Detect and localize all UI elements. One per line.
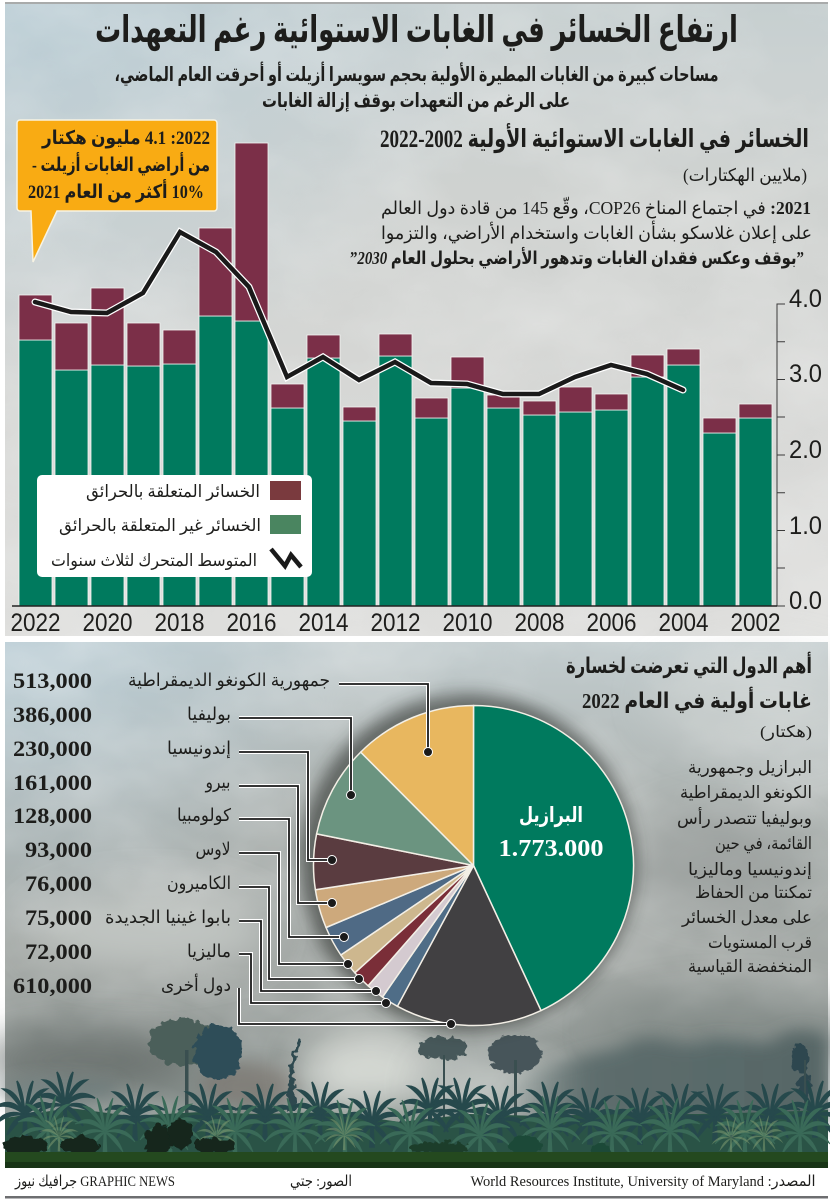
year labels: 2006 — [586, 609, 636, 637]
slice: Cameroon — [355, 866, 474, 986]
country names: بابوا غينيا الجديدة — [105, 907, 231, 927]
pie commentary: على معدل الخسائر — [681, 908, 812, 927]
Brazil label: البرازيل — [519, 803, 583, 827]
bars: non-fire losses — [19, 316, 772, 606]
legend — [37, 475, 312, 577]
country values: 610,000 — [13, 973, 92, 998]
year labels: 2020 — [82, 609, 132, 637]
axis labels: 4.0 — [789, 285, 822, 313]
callout: 2022: من أراضي الغابات أزيلت - — [32, 152, 210, 176]
year labels: 2018 — [154, 609, 204, 637]
country names: دول أخرى — [161, 973, 231, 996]
distant smoky tree line — [0, 1030, 828, 1125]
country values: 72,000 — [25, 939, 92, 964]
country names: ماليزيا — [187, 941, 231, 961]
COP26 note: على إعلان غلاسكو بشأن الغابات واستخدام الأراضي، والتزموا — [381, 220, 812, 244]
subtitle: على الرغم من التعهدات بوقف إزالة الغابات — [262, 91, 570, 112]
subtitle — [114, 61, 718, 112]
year labels: 2012 — [370, 609, 420, 637]
pie commentary: قرب المستويات — [708, 933, 812, 952]
slice: DR Congo — [361, 706, 474, 866]
pie unit: (هكتار) — [760, 724, 812, 742]
country names — [105, 670, 330, 996]
country names: جمهورية الكونغو الديمقراطية — [128, 670, 330, 691]
year labels: 2004 — [658, 609, 709, 637]
country values: 230,000 — [13, 736, 92, 761]
axis — [12, 304, 785, 606]
photo: burning forest — [0, 1018, 830, 1168]
pie commentary: القائمة، في حين — [715, 834, 812, 854]
moving average line — [35, 232, 683, 394]
country names: بوليفيا — [187, 704, 231, 724]
dark bushes — [3, 1119, 610, 1159]
axis labels: 2.0 — [789, 436, 822, 464]
country names: كولومبيا — [177, 805, 232, 825]
country values: 76,000 — [25, 871, 92, 896]
country names: إندونيسيا — [167, 738, 231, 759]
Brazil label: 1.773.000 — [498, 836, 604, 862]
legend: non-fire losses: الخسائر غير المتعلقة بالحرائق — [59, 516, 261, 535]
slice: other countries — [397, 866, 541, 1026]
country values: 75,000 — [25, 905, 92, 930]
COP26 note: 2021: في اجتماع المناخ COP26، وقّع 145 من قادة دول العالم — [381, 197, 811, 219]
pie commentary: إندونيسيا وماليزيا — [688, 860, 812, 879]
country names: لاوس — [196, 839, 230, 860]
pie heading — [566, 651, 812, 713]
axis labels: 3.0 — [789, 360, 822, 388]
slice: Indonesia — [314, 834, 474, 890]
slice: Malaysia — [382, 866, 474, 1006]
slice: Bolivia — [317, 752, 474, 866]
foreground grass — [5, 1152, 828, 1168]
callout: 2022: 2022: 4.1 مليون هكتار — [41, 128, 210, 149]
Brazil label — [498, 803, 604, 862]
year labels: 2022 — [10, 609, 60, 637]
pie shadow — [300, 694, 636, 1030]
legend: fire losses: الخسائر المتعلقة بالحرائق — [86, 482, 260, 501]
slice: Brazil — [474, 706, 634, 1011]
country values: 128,000 — [13, 803, 92, 828]
slice: Colombia — [326, 866, 474, 955]
footer — [14, 1174, 816, 1191]
photo credit: الصور: جتي — [290, 1174, 352, 1191]
palm canopy — [0, 1072, 830, 1158]
bars: fire losses — [19, 143, 772, 433]
year labels: 2010 — [442, 609, 492, 637]
country values: 93,000 — [25, 837, 92, 862]
panel: lower background — [0, 642, 830, 1168]
publisher credit: GRAPHIC NEWS جرافيك نيوز — [14, 1174, 175, 1190]
country values — [13, 668, 92, 998]
tall trees — [149, 1018, 812, 1112]
panel: upper background — [5, 2, 828, 636]
stacked bar chart — [19, 143, 772, 606]
leader lines — [239, 684, 456, 1028]
pie commentary: تمكنتا من الحفاظ — [695, 883, 812, 902]
chart unit: (ملايين الهكتارات) — [683, 165, 807, 186]
axis labels — [789, 285, 822, 615]
slice: Laos — [341, 866, 474, 973]
year labels: 2008 — [514, 609, 564, 637]
axis labels: 1.0 — [789, 512, 822, 540]
slice: Papua New Guinea — [368, 866, 474, 997]
pie commentary: البرازيل وجمهورية — [688, 758, 812, 778]
country names: بيرو — [205, 772, 230, 793]
pie commentary: المنخفضة القياسية — [688, 957, 812, 976]
country values: 513,000 — [13, 668, 92, 693]
pie chart — [314, 706, 634, 1026]
callout: 2022 — [17, 120, 217, 262]
country names: الكاميرون — [167, 873, 231, 894]
country values: 161,000 — [13, 770, 92, 795]
source credit: المصدر: World Resources Institute, University of Maryland — [471, 1174, 816, 1190]
year labels — [10, 609, 780, 637]
pie commentary: الكونغو الديمقراطية — [680, 783, 812, 802]
bottom rule — [5, 1196, 828, 1198]
pie commentary: وبوليفيا تتصدر رأس — [677, 807, 812, 828]
callout: 2022: 10% أكثر من العام 2021 — [28, 179, 204, 203]
year labels: 2016 — [226, 609, 276, 637]
axis labels: 0.0 — [789, 587, 822, 615]
pie commentary — [677, 758, 812, 976]
COP26 note — [350, 197, 812, 269]
country values: 386,000 — [13, 702, 92, 727]
year labels: 2014 — [298, 609, 349, 637]
year labels: 2002 — [730, 609, 780, 637]
slice: Peru — [315, 866, 474, 928]
legend: moving average: المتوسط المتحرك لثلاث سنوات — [51, 551, 257, 570]
